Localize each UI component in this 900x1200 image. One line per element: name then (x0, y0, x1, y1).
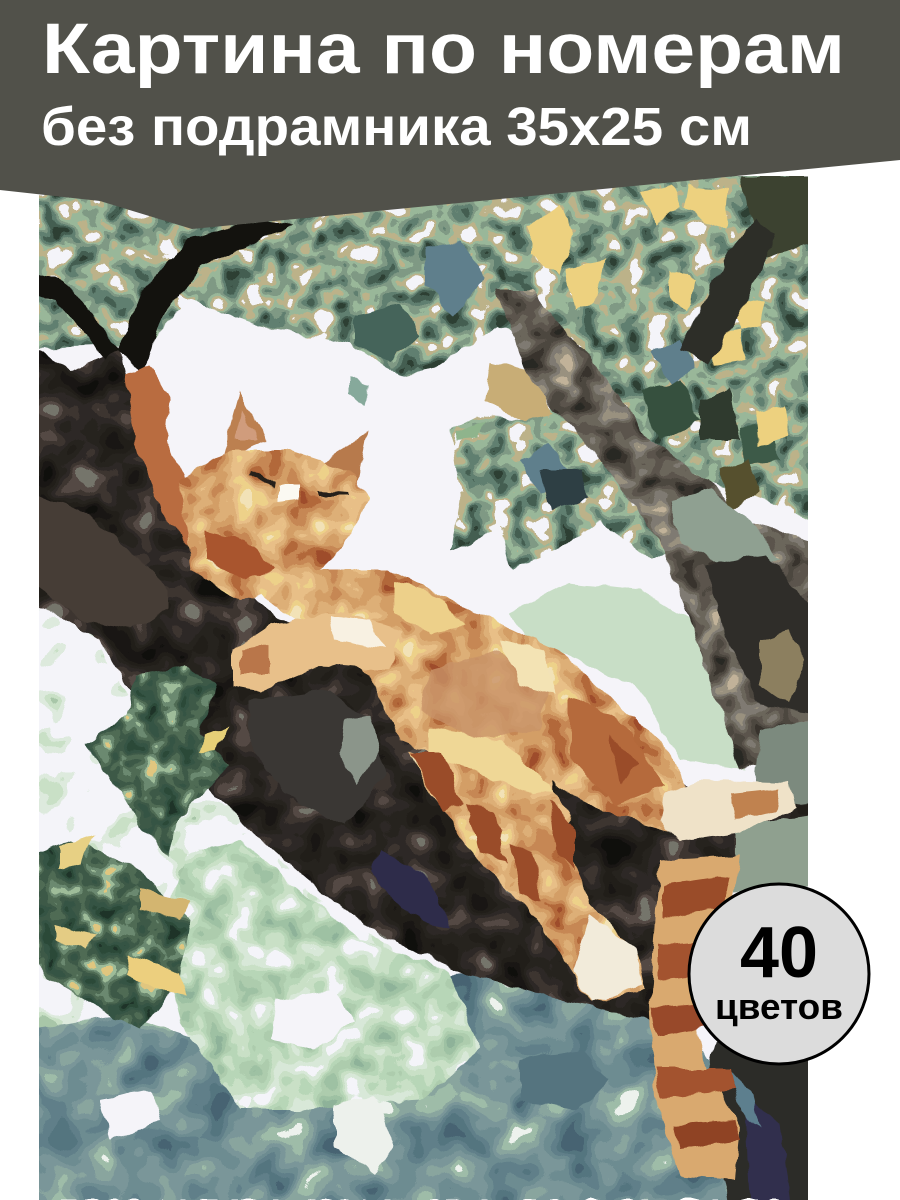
branch below the extended leg (735, 815, 810, 890)
cat front arm (232, 610, 400, 690)
cat leg stripes (412, 735, 640, 902)
bottom grey-blue foliage mass (20, 960, 730, 1200)
lower-right dark tree (709, 1042, 808, 1200)
main trunk (20, 340, 830, 1022)
lower-left haze (39, 610, 393, 1037)
right tree trunk (495, 290, 810, 770)
cat body (262, 569, 686, 832)
title: Картина по номерам (42, 10, 845, 89)
cat extended leg (660, 780, 795, 841)
trunk details (10, 490, 450, 930)
yellow leaves (485, 184, 790, 445)
dark foliage accents (350, 176, 810, 510)
cat head (180, 450, 370, 600)
left leaves cluster (20, 665, 230, 1030)
blue-grey foliage accents (355, 240, 780, 495)
right foliage leaves over the sky (450, 409, 665, 570)
cat hind paw (573, 915, 643, 1002)
upper-left black branch (39, 222, 294, 370)
cat belly highlights (395, 580, 665, 805)
subtitle: без подрамника 35х25 см (41, 97, 752, 157)
cat tail (650, 855, 740, 1180)
right trunk details (670, 220, 810, 830)
cat raised arm (124, 366, 189, 546)
badge number: 40 (740, 913, 818, 993)
cat hind leg (410, 750, 645, 1002)
cat (125, 365, 795, 1180)
badge label: цветов (715, 986, 843, 1027)
pale green haze patch (160, 840, 480, 1110)
right haze (510, 582, 745, 770)
cat face (205, 470, 352, 580)
painting: sleeping ginger cat on a tree branch (10, 160, 830, 1200)
bottom highlights (100, 990, 610, 1175)
header banner (0, 0, 900, 229)
cat ears (222, 392, 268, 458)
top foliage (39, 176, 808, 520)
badge: 40 colours (689, 884, 869, 1064)
